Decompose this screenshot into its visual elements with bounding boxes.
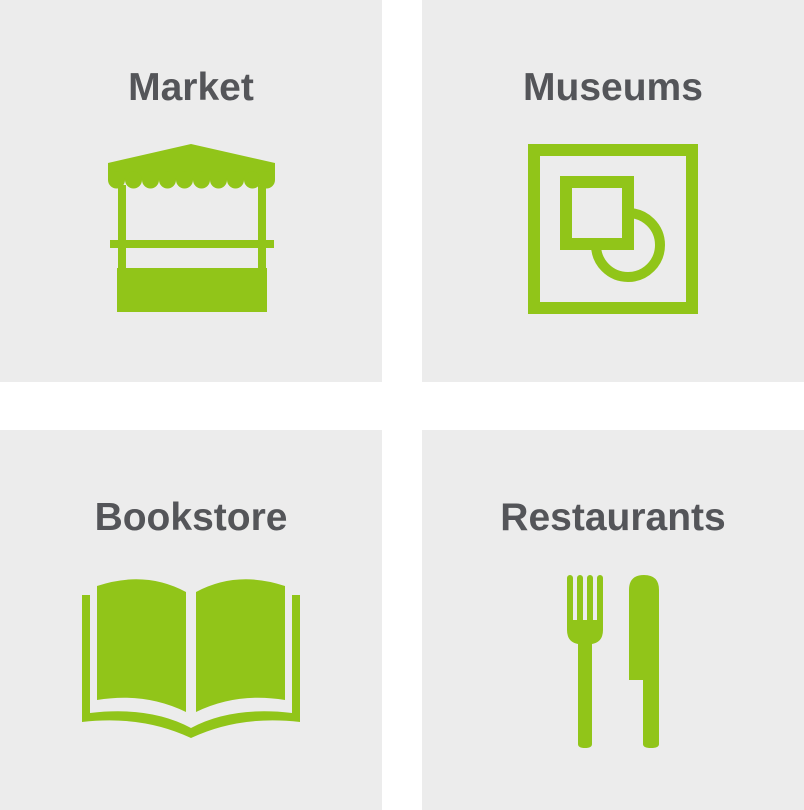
heading: Restaurants: Restaurants <box>500 496 726 539</box>
panel: museums <box>422 0 804 382</box>
heading: Museums: Museums <box>523 66 703 109</box>
icon: museum art <box>528 144 698 314</box>
icon: fork and knife <box>567 575 659 748</box>
icon: market stall <box>108 144 275 312</box>
panel: market <box>0 0 382 382</box>
panel: bookstore <box>0 430 382 810</box>
heading: Bookstore: Bookstore <box>95 496 287 539</box>
heading: Market: Market <box>128 66 254 109</box>
panel: restaurants <box>422 430 804 810</box>
icon: open book <box>82 579 300 738</box>
